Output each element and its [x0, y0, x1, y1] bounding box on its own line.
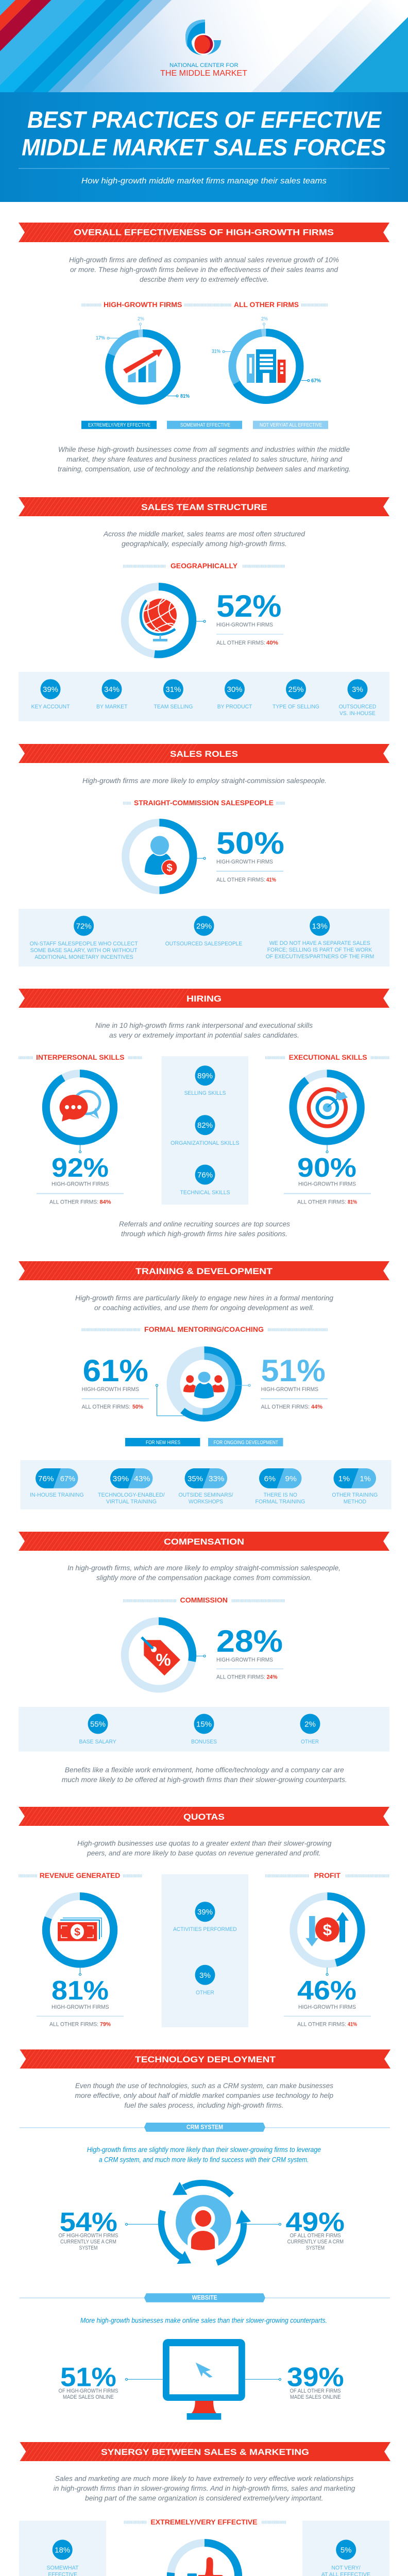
subheadings: high-growth and all other firms: [81, 300, 328, 309]
stat: organizational skills: [171, 1115, 240, 1146]
subheading: formal mentoring/coaching: FORMAL MENTORING/COACHING: [144, 1325, 264, 1333]
stat: on-staff salespeople: [30, 916, 138, 960]
stat: 54% use CRM: SYSTEM: [79, 2245, 97, 2251]
ribbon heading: hiring: HIRING: [186, 994, 222, 1004]
stat: 52% high-growth firms: ALL OTHER FIRMS:: [216, 640, 265, 646]
section: technology deployment: [20, 2049, 390, 2420]
stat: 52% high-growth firms: 40%: [266, 640, 278, 646]
stat: outsourced vs in-house: VS. IN-HOUSE: [339, 710, 376, 717]
panel: somewhat effective: 18%: [55, 2546, 70, 2554]
legend: new hires and ongoing development: [125, 1438, 283, 1446]
stat: type of selling: [273, 679, 319, 710]
stat: base salary: [79, 1714, 116, 1745]
stat: in-house training: [30, 1468, 84, 1498]
paragraph: recruiting sources: Referrals and online recruiting sources are top sources: [119, 1220, 290, 1228]
intro paragraph: [69, 256, 339, 283]
stat: base salary: 55%: [90, 1720, 106, 1729]
ribbon heading: sales team structure: [19, 497, 389, 516]
ribbon heading: technology deployment: TECHNOLOGY DEPLOYMENT: [135, 2055, 276, 2064]
subheading: commission: [123, 1596, 285, 1604]
panel: somewhat effective: [19, 2521, 106, 2576]
paragraph: commission share: [67, 1564, 341, 1582]
stat: 28% high-growth firms: ALL OTHER FIRMS:: [216, 1674, 265, 1681]
stat: selling skills: SELLING SKILLS: [184, 1090, 226, 1096]
donut: high-growth firms effectiveness: [96, 316, 190, 401]
ribbon heading: sales roles: SALES ROLES: [170, 749, 238, 759]
stat: technology-enabled training: [98, 1468, 165, 1505]
stat: other training method: OTHER TRAINING: [332, 1492, 378, 1498]
subheading: profit: PROFIT: [314, 1871, 341, 1879]
stat: selling skills: [184, 1065, 226, 1096]
stat: other training method: METHOD: [344, 1499, 366, 1505]
ribbon heading: quotas: QUOTAS: [183, 1812, 225, 1822]
subheading: revenue generated: [18, 1871, 142, 1879]
stat: in-house training: 67%: [60, 1475, 75, 1483]
icon: speech bubbles: [60, 1091, 100, 1122]
legend: effectiveness levels: EXTREMELY/VERY EFFECTIVE: [88, 422, 150, 428]
icon: CRM person with cycle arrows: [161, 2182, 251, 2264]
stat: 90% executional skills: 90%: [297, 1153, 356, 1183]
tab heading: website: WEBSITE: [192, 2294, 217, 2301]
icon: thumbs up: [188, 2557, 224, 2576]
stat: other training method: [332, 1468, 378, 1505]
paragraph: benefits: [62, 1766, 347, 1784]
stat: 51% online sales: MADE SALES ONLINE: [63, 2394, 114, 2400]
logo: National Center for the Middle Market: NATIONAL CENTER FOR: [169, 62, 239, 69]
ribbon heading: training and development: TRAINING & DEVELOPMENT: [135, 1266, 273, 1276]
subheading: interpersonal skills: INTERPERSONAL SKILLS: [36, 1053, 125, 1061]
donut: 52% geographically: [125, 587, 206, 654]
icon: stack of money: $: [74, 1926, 80, 1938]
subheading: extremely/very effective: EXTREMELY/VERY EFFECTIVE: [150, 2518, 258, 2526]
stat: 50% high-growth firms: [216, 826, 284, 883]
stat: technology-enabled training: TECHNOLOGY-ENABLED/: [98, 1492, 165, 1498]
paragraph: work relationships: in high-growth firms than in slower-growing firms. And in high-growth firms, sales and marketing: [54, 2484, 355, 2493]
stat: by product: BY PRODUCT: [217, 704, 252, 710]
subheading: straight-commission salespeople: STRAIGHT-COMMISSION SALESPEOPLE: [134, 799, 274, 807]
stat: type of selling: 25%: [288, 685, 304, 694]
tab heading: CRM system: [20, 2123, 390, 2132]
stat: 52% high-growth firms: HIGH-GROWTH FIRMS: [216, 622, 273, 628]
donut: high-growth firms effectiveness: 17%: [96, 335, 105, 341]
stat: by market: BY MARKET: [96, 704, 128, 710]
donut: high-growth firms effectiveness: 2%: [138, 316, 144, 322]
paragraph: shared practices: [58, 445, 351, 473]
stat: 54% use CRM: 54%: [60, 2208, 117, 2238]
paragraph: mentoring: or coaching activities, and use them for ongoing development as well.: [94, 1303, 314, 1312]
stat: no separate sales force: WE DO NOT HAVE A SEPARATE SALES: [269, 940, 370, 946]
stat: 92% interpersonal skills: HIGH-GROWTH FIRMS: [52, 1181, 109, 1188]
stat: activities performed: 39%: [197, 1908, 213, 1917]
header stripes: [0, 0, 408, 92]
stat: 61% new hires: 61%: [83, 1353, 148, 1388]
section: synergy between sales and marketing: [19, 2442, 390, 2576]
section: training and development: [19, 1261, 392, 1510]
stat: type of selling: TYPE OF SELLING: [273, 704, 319, 710]
stat: 61% new hires: ALL OTHER FIRMS:: [82, 1404, 130, 1410]
stat: other: [300, 1714, 320, 1745]
stat: other: 3%: [199, 1971, 211, 1980]
panel: other salesperson types: [19, 909, 389, 967]
stat: 81% revenue generated: 81%: [52, 1976, 109, 2006]
donut: all other firms effectiveness: [212, 316, 321, 400]
stat: outside seminars: 35%: [188, 1475, 203, 1483]
icon: profit up and down arrows: $: [323, 1921, 332, 1939]
panel: training methods: [20, 1460, 392, 1510]
stat: 28% high-growth firms: 24%: [267, 1674, 278, 1681]
stat: 39% online sales: [245, 2363, 344, 2400]
stat: 54% use CRM: [59, 2208, 159, 2251]
intro paragraph: or more. These high-growth firms believe in the effectiveness of their sales teams and: [70, 265, 338, 274]
paragraph: skills importance: Nine in 10 high-growth firms rank interpersonal and executional skills: [95, 1021, 313, 1029]
paragraph: recruiting sources: through which high-growth firms hire sales positions.: [121, 1230, 287, 1238]
stat: team selling: TEAM SELLING: [154, 704, 193, 710]
donut: all other firms effectiveness: 31%: [212, 349, 220, 354]
stat: by market: [96, 679, 128, 710]
stat: 49% use CRM: 49%: [285, 2208, 345, 2238]
panel: other compensation components: [19, 1707, 389, 1752]
paragraph: geographic structure: [103, 530, 305, 548]
icon: percent price tag: %: [156, 1650, 171, 1669]
donut: all other firms effectiveness: 67%: [311, 378, 321, 384]
stat: outside seminars: 33%: [209, 1475, 224, 1483]
stat: outsourced vs in-house: [339, 679, 376, 717]
stat: 92% interpersonal skills: ALL OTHER FIRMS:: [49, 1199, 98, 1206]
donut: 50% straight commission: [126, 823, 206, 890]
stat: 90% executional skills: 81%: [348, 1199, 357, 1206]
stat: 50% high-growth firms: HIGH-GROWTH FIRMS: [216, 859, 273, 865]
panel: not very/at all effective: NOT VERY/: [331, 2565, 361, 2571]
subheading: revenue generated: REVENUE GENERATED: [40, 1871, 120, 1879]
stat: in-house training: IN-HOUSE TRAINING: [30, 1492, 84, 1498]
paragraph: work relationships: [54, 2475, 355, 2502]
donut: high-growth firms effectiveness: 81%: [180, 394, 190, 399]
icon: stack of money: [58, 1918, 101, 1941]
stat: base salary: BASE SALARY: [79, 1739, 116, 1745]
paragraph: quota use: High-growth businesses use quotas to a greater extent than their slower-growing: [77, 1839, 332, 1848]
icon: rising bar chart with arrow: [123, 349, 163, 382]
paragraph: skills importance: as very or extremely important in potential sales candidates.: [109, 1031, 299, 1039]
donut: all other firms effectiveness: 2%: [261, 316, 268, 322]
stat: technology-enabled training: 39%: [113, 1475, 129, 1483]
stat: outside seminars: [178, 1468, 233, 1505]
icon: salesperson with dollar badge: [145, 836, 177, 875]
donut: 46% profit: [294, 1896, 361, 1975]
icon: globe: [141, 599, 177, 641]
paragraph: benefits: Benefits like a flexible work environment, home office/technology and a company car are: [65, 1766, 344, 1774]
subheading: profit: [265, 1871, 389, 1879]
stat: on-staff salespeople: ADDITIONAL MONETARY INCENTIVES: [35, 954, 133, 960]
stat: outsourced vs in-house: OUTSOURCED: [339, 704, 376, 710]
ribbon heading: technology deployment: [20, 2049, 390, 2069]
section: quotas: [18, 1807, 389, 2028]
stat: by product: 30%: [227, 685, 243, 694]
stat: 81% revenue generated: 79%: [100, 2022, 111, 2028]
stat: outsourced salespeople: [165, 916, 242, 947]
section: sales team structure: [19, 497, 389, 721]
subheading: formal mentoring/coaching: [81, 1325, 328, 1333]
paragraph: technology use: more effective, only about half of middle market companies use technology to help: [75, 2091, 333, 2099]
stat: no formal training: THERE IS NO: [264, 1492, 297, 1498]
stat: 46% profit: [284, 1976, 371, 2028]
ribbon heading: sales team structure: SALES TEAM STRUCTURE: [141, 502, 267, 512]
stat: 46% profit: ALL OTHER FIRMS:: [297, 2022, 346, 2028]
stat: 50% high-growth firms: 41%: [266, 877, 276, 883]
stat: 92% interpersonal skills: 84%: [100, 1199, 111, 1206]
stat: 28% high-growth firms: 28%: [216, 1624, 283, 1658]
stat: activities performed: [173, 1902, 237, 1933]
stat: 92% interpersonal skills: 92%: [52, 1153, 109, 1183]
stat: key account: KEY ACCOUNT: [31, 704, 70, 710]
stat: in-house training: 76%: [38, 1475, 54, 1483]
ribbon heading: sales and marketing: [20, 2442, 390, 2461]
paragraph: technology use: Even though the use of technologies, such as a CRM system, can make businesses: [75, 2081, 333, 2090]
stat: 39% online sales: 39%: [287, 2363, 344, 2393]
donut: 28% commission: [125, 1621, 206, 1689]
stat: other training method: 1%: [338, 1475, 350, 1483]
paragraph: CRM success: a CRM system, and much more likely to find success with their CRM system.: [99, 2156, 309, 2164]
stat: outsourced vs in-house: 3%: [352, 685, 363, 694]
logo: National Center for the Middle Market: THE MIDDLE MARKET: [160, 69, 248, 78]
icon: group of people: [183, 1371, 225, 1398]
subheading: geographically: GEOGRAPHICALLY: [171, 562, 238, 570]
section: overall effectiveness: [19, 223, 389, 473]
stat: 81% revenue generated: ALL OTHER FIRMS:: [49, 2022, 98, 2028]
stat: other: OTHER: [301, 1739, 319, 1745]
section: sales roles: [19, 744, 389, 967]
paragraph: benefits: much more likely to be offered at high-growth firms than their slower-growing counterparts.: [62, 1775, 347, 1784]
icon: salesperson with dollar badge: $: [166, 862, 173, 874]
ribbon heading: quotas: [19, 1807, 389, 1826]
stat: other: 2%: [304, 1720, 316, 1729]
logo: National Center for the Middle Market: [160, 20, 248, 78]
stat: 61% new hires: 50%: [132, 1404, 143, 1410]
legend: effectiveness levels: [81, 421, 328, 429]
stat: organizational skills: ORGANIZATIONAL SKILLS: [171, 1140, 240, 1146]
stat: 28% high-growth firms: [216, 1624, 283, 1681]
stat: outside seminars: OUTSIDE SEMINARS/: [178, 1492, 233, 1498]
title banner: BEST PRACTICES OF EFFECTIVE: [27, 107, 382, 133]
ribbon heading: compensation: [19, 1532, 389, 1551]
icon: profit up and down arrows: [305, 1912, 349, 1946]
paragraph: quota use: peers, and are more likely to base quotas on revenue generated and profit.: [87, 1849, 321, 1857]
paragraph: technology use: [75, 2081, 333, 2109]
stat: 49% use CRM: [246, 2208, 345, 2251]
subheadings: high-growth and all other firms: ALL OTHER FIRMS: [234, 300, 299, 309]
paragraph: straight commission: High-growth firms are more likely to employ straight-commission salespeople.: [82, 776, 327, 785]
stat: 46% profit: 41%: [348, 2022, 357, 2028]
ribbon heading: hiring: [19, 989, 389, 1008]
stat: 54% use CRM: OF HIGH-GROWTH FIRMS: [59, 2233, 118, 2239]
paragraph: work relationships: being part of the same organization is considered extremely/very important.: [85, 2494, 323, 2502]
panel: other quota bases: [162, 1874, 248, 2027]
paragraph: CRM success: High-growth firms are slightly more likely than their slower-growing firms to leverage: [87, 2145, 321, 2154]
stat: organizational skills: 82%: [197, 1121, 213, 1130]
stat: 52% high-growth firms: 52%: [216, 589, 281, 623]
subheading: executional skills: EXECUTIONAL SKILLS: [289, 1053, 367, 1061]
panel: other skills: [162, 1056, 248, 1205]
paragraph: mentoring: [75, 1294, 333, 1312]
double donut: 61% new hires and 51% ongoing development: [156, 1350, 250, 1418]
subheading: commission: COMMISSION: [180, 1596, 228, 1604]
stat: 28% high-growth firms: HIGH-GROWTH FIRMS: [216, 1657, 273, 1663]
donut: 77% extremely/very effective: [171, 2543, 239, 2576]
stat: bonuses: BONUSES: [191, 1739, 217, 1745]
stat: 39% online sales: MADE SALES ONLINE: [290, 2394, 341, 2400]
panel: not very/at all effective: 5%: [341, 2546, 352, 2554]
stat: technical skills: [180, 1164, 230, 1196]
stat: no separate sales force: FORCE; SELLING IS PART OF THE WORK: [267, 947, 372, 953]
paragraph: mentoring: High-growth firms are particularly likely to engage new hires in a formal mentoring: [75, 1294, 333, 1302]
stat: technical skills: 76%: [197, 1171, 213, 1180]
stat: 92% interpersonal skills: [37, 1153, 124, 1206]
stat: 51% online sales: [59, 2363, 163, 2400]
stat: 51% online sales: 51%: [60, 2363, 116, 2393]
panel: somewhat effective: SOMEWHAT: [46, 2565, 79, 2571]
panel: other team structures: [19, 672, 389, 721]
stat: technology-enabled training: 43%: [134, 1475, 150, 1483]
stat: 54% use CRM: CURRENTLY USE A CRM: [60, 2239, 116, 2245]
stat: 49% use CRM: SYSTEM: [306, 2245, 325, 2251]
stat: by product: [217, 679, 252, 710]
stat: no formal training: [256, 1468, 305, 1505]
stat: no formal training: 6%: [264, 1475, 276, 1483]
paragraph: commission share: slightly more of the compensation package comes from commission.: [96, 1573, 312, 1582]
paragraph: shared practices: market, they share features and business practices related to sales structure, hiring and: [66, 455, 343, 463]
ribbon heading: training and development: [19, 1261, 389, 1280]
stat: no separate sales force: [266, 916, 374, 960]
stat: team selling: 31%: [165, 685, 181, 694]
stat: outside seminars: WORKSHOPS: [189, 1499, 223, 1505]
stat: selling skills: 89%: [197, 1072, 213, 1080]
legend: effectiveness levels: NOT VERY/AT ALL EFFECTIVE: [260, 422, 322, 428]
paragraph: shared practices: training, compensation, use of technology and the relationship between sales and marketing.: [58, 465, 351, 473]
donut: 92% interpersonal skills: [46, 1074, 114, 1153]
stat: other training method: 1%: [360, 1475, 371, 1483]
section: hiring: [18, 989, 389, 1238]
section: compensation: [19, 1532, 389, 1784]
paragraph: commission share: In high-growth firms, which are more likely to employ straight-commission salespeople,: [67, 1564, 341, 1572]
stat: 49% use CRM: CURRENTLY USE A CRM: [287, 2239, 344, 2245]
stat: by market: 34%: [104, 685, 120, 694]
stat: bonuses: 15%: [196, 1720, 212, 1729]
stat: outsourced salespeople: OUTSOURCED SALESPEOPLE: [165, 941, 242, 947]
stat: 51% ongoing development: HIGH-GROWTH FIRMS: [261, 1386, 318, 1393]
intro paragraph: High-growth firms are defined as companies with annual sales revenue growth of 10%: [69, 256, 339, 264]
stat: 61% new hires: HIGH-GROWTH FIRMS: [82, 1386, 139, 1393]
stat: 39% online sales: OF ALL OTHER FIRMS: [290, 2388, 341, 2394]
paragraph: technology use: fuel the sales process, including high-growth firms.: [124, 2101, 283, 2109]
stat: 51% ongoing development: [261, 1353, 328, 1410]
ribbon heading: sales and marketing: SYNERGY BETWEEN SALES & MARKETING: [101, 2447, 309, 2457]
stat: 52% high-growth firms: [216, 589, 283, 646]
paragraph: recruiting sources: [119, 1220, 290, 1238]
intro paragraph: describe them very to extremely effective.: [140, 275, 269, 283]
paragraph: work relationships: Sales and marketing are much more likely to have extremely to very effective work relationships: [55, 2475, 353, 2483]
title banner: How high-growth middle market firms manage their sales teams: [81, 177, 327, 185]
stat: 51% ongoing development: 51%: [261, 1353, 326, 1388]
paragraph: skills importance: [95, 1021, 313, 1039]
title banner: MIDDLE MARKET SALES FORCES: [22, 134, 386, 161]
stat: 50% high-growth firms: ALL OTHER FIRMS:: [216, 877, 265, 883]
stat: no formal training: 9%: [285, 1475, 297, 1483]
stat: 46% profit: HIGH-GROWTH FIRMS: [298, 2004, 356, 2010]
donut: 90% executional skills: [293, 1074, 361, 1153]
stat: 90% executional skills: ALL OTHER FIRMS:: [297, 1199, 346, 1206]
stat: team selling: [154, 679, 193, 710]
paragraph: online sales: More high-growth businesses make online sales than their slower-growing counterparts.: [80, 2316, 327, 2325]
stat: technical skills: TECHNICAL SKILLS: [180, 1190, 230, 1196]
stat: outsourced salespeople: 29%: [196, 922, 212, 930]
tab heading: CRM system: CRM SYSTEM: [186, 2124, 223, 2131]
paragraph: geographic structure: Across the middle market, sales teams are most often structured: [103, 530, 305, 538]
stat: 81% revenue generated: [37, 1976, 124, 2028]
stat: 90% executional skills: HIGH-GROWTH FIRMS: [298, 1181, 356, 1188]
stat: 51% online sales: OF HIGH-GROWTH FIRMS: [59, 2388, 118, 2394]
stat: technology-enabled training: VIRTUAL TRAINING: [106, 1499, 157, 1505]
ribbon heading: overall effectiveness: [19, 223, 389, 242]
donut: 81% revenue generated: [46, 1896, 114, 1975]
legend: new hires and ongoing development: FOR ONGOING DEVELOPMENT: [214, 1439, 278, 1446]
paragraph: geographic structure: geographically, especially among high-growth firms.: [122, 539, 287, 548]
icon: target with dart: [309, 1089, 348, 1126]
stat: 51% ongoing development: ALL OTHER FIRMS:: [261, 1404, 310, 1410]
legend: new hires and ongoing development: FOR NEW HIRES: [146, 1439, 180, 1446]
stat: 81% revenue generated: HIGH-GROWTH FIRMS: [52, 2004, 109, 2010]
paragraph: quota use: [77, 1839, 332, 1857]
stat: on-staff salespeople: 72%: [76, 922, 92, 930]
stat: 61% new hires: [82, 1353, 149, 1410]
stat: no formal training: FORMAL TRAINING: [256, 1499, 305, 1505]
icon: office buildings: [247, 349, 285, 383]
subheading: executional skills: [265, 1053, 389, 1061]
stat: 51% ongoing development: 44%: [311, 1404, 322, 1410]
title banner: [0, 92, 408, 202]
tab heading: website: [20, 2293, 390, 2302]
stat: key account: 39%: [43, 685, 58, 694]
stat: no separate sales force: OF EXECUTIVES/PARTNERS OF THE FIRM: [266, 954, 374, 960]
paragraph: shared practices: While these high-growth businesses come from all segments and industries within the middle: [58, 445, 350, 453]
subheading: geographically: [123, 562, 285, 570]
subheadings: high-growth and all other firms: HIGH-GROWTH FIRMS: [104, 300, 182, 309]
stat: bonuses: [191, 1714, 217, 1745]
stat: no separate sales force: 13%: [312, 922, 328, 930]
stat: activities performed: ACTIVITIES PERFORMED: [173, 1926, 237, 1933]
stat: 49% use CRM: OF ALL OTHER FIRMS: [290, 2233, 341, 2239]
icon: percent price tag: [142, 1637, 180, 1675]
panel: not very/at all effective: [302, 2521, 389, 2576]
subheading: extremely/very effective: [124, 2518, 286, 2526]
stat: 50% high-growth firms: 50%: [216, 826, 284, 860]
icon: computer monitor with cursor: [163, 2339, 245, 2420]
stat: other: OTHER: [196, 1990, 214, 1996]
stat: other: [195, 1965, 215, 1996]
ribbon heading: overall effectiveness: OVERALL EFFECTIVENESS OF HIGH-GROWTH FIRMS: [74, 228, 334, 238]
stat: key account: [31, 679, 70, 710]
ribbon heading: compensation: COMPENSATION: [164, 1537, 244, 1547]
stat: on-staff salespeople: SOME BASE SALARY, WITH OR WITHOUT: [30, 947, 138, 954]
ribbon heading: sales roles: [19, 744, 389, 763]
stat: 90% executional skills: [284, 1153, 371, 1206]
paragraph: CRM success: [87, 2145, 321, 2164]
stat: 46% profit: 46%: [297, 1976, 356, 2006]
legend: effectiveness levels: SOMEWHAT EFFECTIVE: [180, 422, 230, 428]
stat: on-staff salespeople: ON-STAFF SALESPEOPLE WHO COLLECT: [30, 941, 138, 947]
